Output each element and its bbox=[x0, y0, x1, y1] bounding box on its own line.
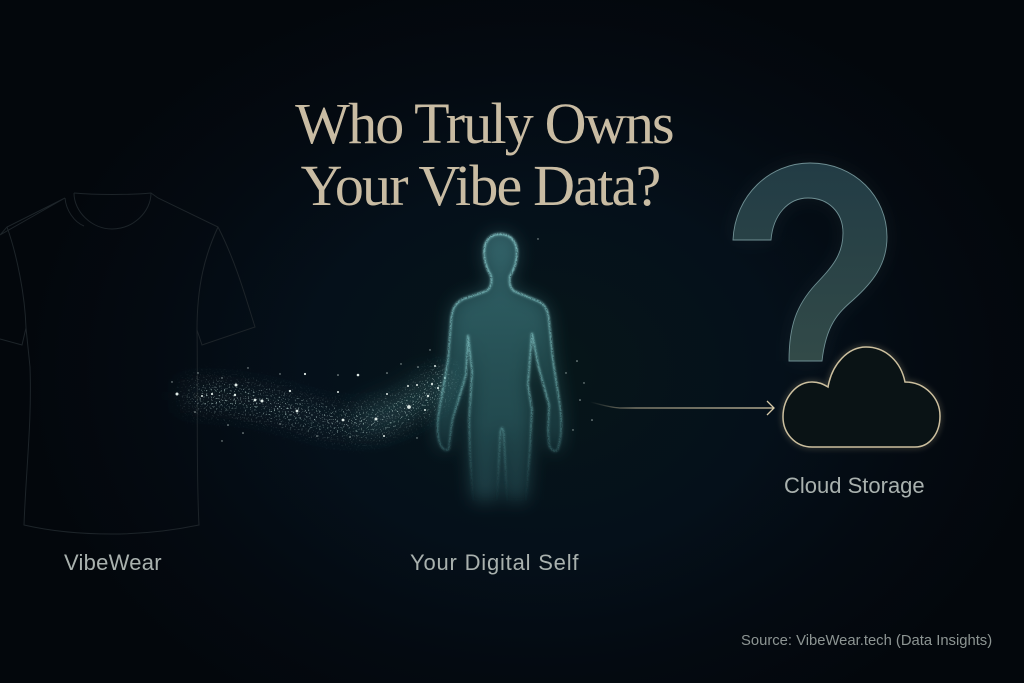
title: Who Truly Owns bbox=[295, 91, 673, 156]
label: Cloud Storage: Cloud Storage bbox=[784, 473, 925, 498]
icon: cloud bbox=[783, 347, 940, 447]
icon: t-shirt outline bbox=[0, 193, 255, 534]
title: Your Vibe Data? bbox=[301, 153, 659, 218]
particle stream bbox=[171, 238, 593, 442]
figure: glowing digital self bbox=[438, 234, 561, 500]
source note: Source: VibeWear.tech (Data Insights) bbox=[741, 633, 992, 649]
arrow to cloud bbox=[590, 401, 774, 415]
label: VibeWear: VibeWear bbox=[64, 550, 162, 575]
icon: question mark bbox=[733, 163, 887, 361]
title bbox=[295, 91, 673, 218]
label: Your Digital Self: Your Digital Self bbox=[410, 550, 579, 575]
